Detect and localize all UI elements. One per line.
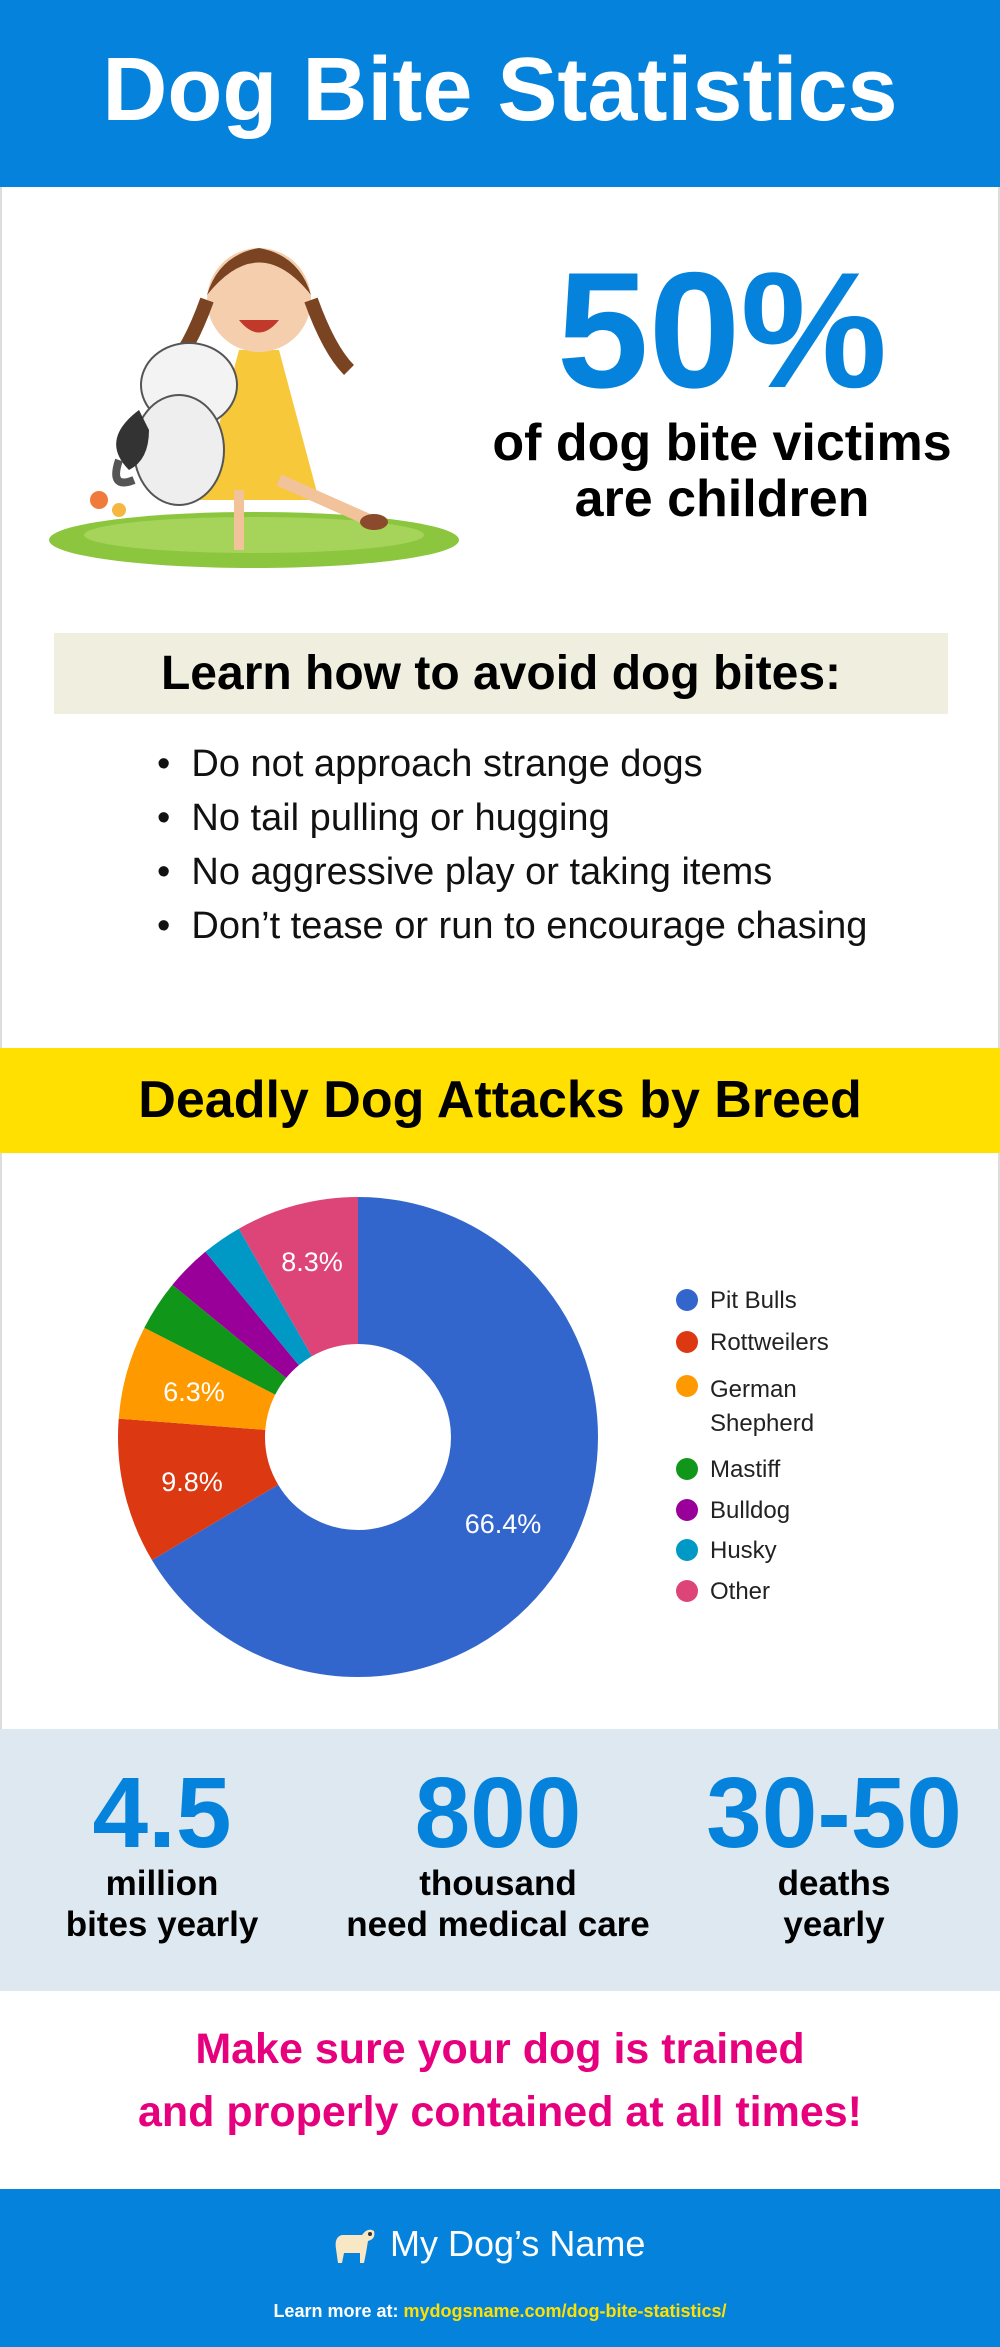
footer [0, 2189, 1000, 2347]
illustration: girl hugging dog [49, 248, 459, 568]
panel: chart: Mastiff [710, 1456, 780, 1483]
stat: 800 thousand [346, 1757, 650, 1944]
panel: chart: Rottweilers [710, 1329, 829, 1356]
heading: deadly attacks [0, 1048, 1000, 1153]
title: Dog Bite Statistics [102, 40, 898, 140]
callout: training: Make sure your dog is trained [195, 2025, 805, 2073]
panel: chart: German [710, 1376, 797, 1403]
legend [676, 1287, 829, 1605]
stat: 800 thousand: 800 [415, 1757, 581, 1869]
donut chart [118, 1197, 598, 1677]
stat: 800 thousand: thousand [419, 1864, 577, 1903]
callout: training: and properly contained at all times! [138, 2088, 862, 2136]
stat: 50%: are children [575, 470, 869, 528]
header [0, 0, 1000, 187]
panel: chart: Other [710, 1578, 770, 1605]
donut chart: 9.8% [161, 1467, 223, 1497]
list: tips: • No tail pulling or hugging [157, 797, 610, 839]
list: tips: • Don’t tease or run to encourage chasing [157, 905, 867, 947]
link text: Learn more at: mydogsname.com/dog-bite-statistics/ [273, 2301, 727, 2321]
donut chart: 6.3% [163, 1377, 225, 1407]
callout: training [138, 2025, 862, 2136]
stat: 50%: of dog bite victims [492, 414, 952, 472]
panel: chart: Shepherd [710, 1410, 814, 1437]
panel: stats [0, 1729, 1000, 1991]
stat: 4.5 million: 4.5 [92, 1757, 232, 1869]
stat: 30-50 deaths: deaths [778, 1864, 890, 1903]
stat: 50%: 50% [557, 238, 887, 422]
heading: learn how [54, 633, 948, 714]
donut chart: 66.4% [465, 1509, 541, 1539]
logo: My Dog’s Name [390, 2223, 645, 2264]
stat: 4.5 million: bites yearly [66, 1905, 258, 1944]
heading: learn how: Learn how to avoid dog bites: [161, 647, 841, 700]
list: tips [157, 743, 867, 947]
stat: 800 thousand: need medical care [346, 1905, 650, 1944]
stat: 30-50 deaths [706, 1757, 962, 1944]
panel: chart [0, 1153, 1000, 1729]
heading: deadly attacks: Deadly Dog Attacks by Breed [138, 1071, 862, 1129]
panel: chart: Bulldog [710, 1497, 790, 1524]
donut chart: 8.3% [281, 1247, 343, 1277]
stat: 4.5 million: million [106, 1864, 218, 1903]
stat: 4.5 million [66, 1757, 258, 1944]
stat: 30-50 deaths: yearly [783, 1905, 885, 1944]
stat: 30-50 deaths: 30-50 [706, 1757, 962, 1869]
panel: chart: Pit Bulls [710, 1287, 797, 1314]
panel: chart: Husky [710, 1537, 777, 1564]
stat: 50% [492, 238, 952, 528]
list: tips: • Do not approach strange dogs [157, 743, 703, 785]
panel: intro [0, 187, 1000, 1048]
list: tips: • No aggressive play or taking items [157, 851, 772, 893]
